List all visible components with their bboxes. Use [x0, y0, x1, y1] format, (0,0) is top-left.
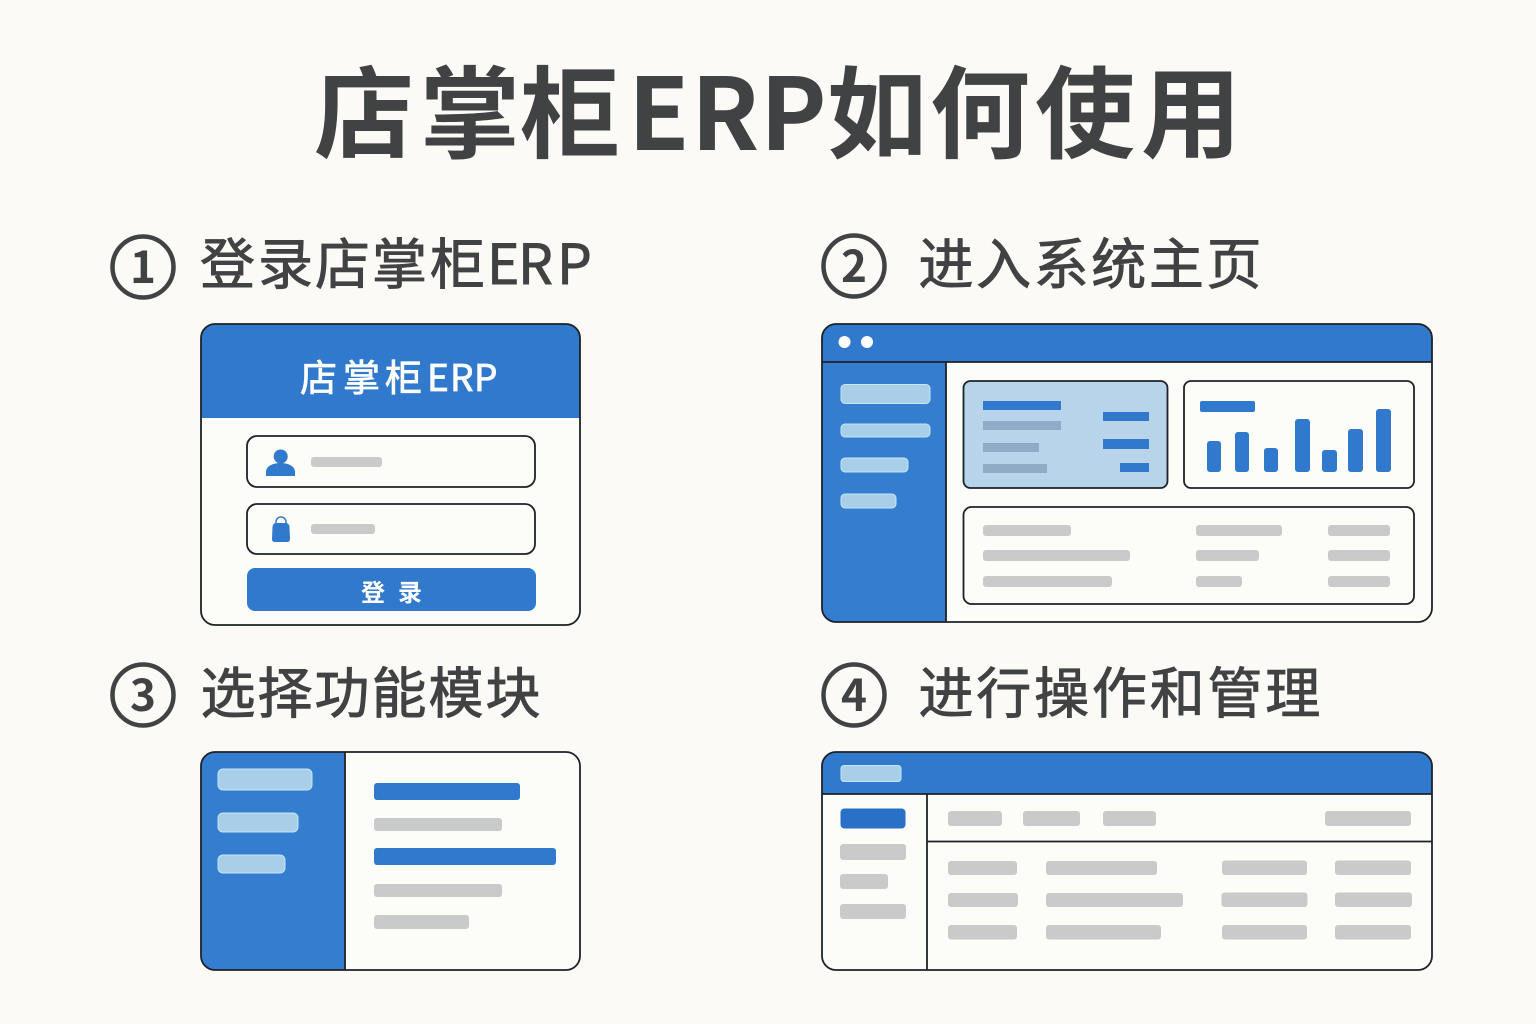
management sidebar items [840, 808, 906, 919]
table rows [948, 860, 1412, 940]
username field [247, 436, 535, 487]
title: 店掌柜ERP如何使用 [314, 34, 1241, 179]
bar chart card [1184, 381, 1414, 488]
panel: login window [201, 324, 580, 625]
data table card [964, 507, 1414, 604]
module menu items [218, 769, 312, 873]
dashboard sidebar items [841, 384, 930, 508]
panel: dashboard window [822, 324, 1432, 622]
panel: module selection window [201, 752, 580, 970]
password field [247, 504, 535, 554]
step 2 heading: 2 [841, 231, 867, 295]
login button: 登录 [361, 573, 422, 608]
login button [247, 568, 536, 611]
login header title: 店掌柜ERP [300, 348, 497, 402]
step 4 heading: 进行操作和管理 [918, 649, 1323, 729]
step 1 heading: 登录店掌柜ERP [200, 220, 592, 300]
module content lines [374, 783, 556, 929]
toolbar [948, 811, 1411, 826]
step 2 heading: 进入系统主页 [918, 220, 1264, 300]
step 4 heading: 4 [841, 660, 867, 724]
header pill [841, 766, 901, 782]
summary card [964, 381, 1168, 488]
panel: management window [822, 752, 1432, 970]
step 3 heading: 3 [130, 660, 156, 724]
step 1 heading: 1 [130, 232, 156, 296]
step 3 heading: 选择功能模块 [200, 649, 543, 729]
window dots [838, 336, 873, 348]
